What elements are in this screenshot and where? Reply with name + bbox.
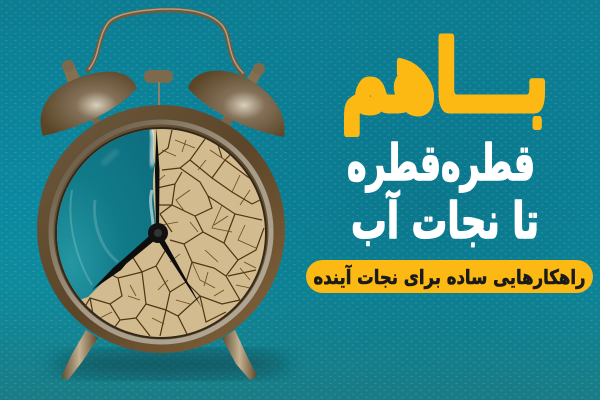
clock case (37, 105, 285, 353)
panel: dry cracked earth (57, 129, 265, 337)
icon: right bell (188, 63, 285, 137)
panel: ocean wave (57, 130, 156, 300)
subtitle pill (306, 260, 593, 293)
icon: left bell (40, 60, 137, 136)
icon: alarm pin (144, 70, 173, 112)
cracks (82, 130, 264, 336)
icon: right leg (222, 330, 257, 380)
clock face (57, 129, 265, 337)
wave foam (70, 128, 153, 285)
clock hands (92, 128, 202, 308)
icon: top handle (88, 9, 243, 74)
alarm clock (37, 9, 285, 380)
clock shadow (50, 350, 290, 378)
icon: left leg (61, 330, 98, 380)
